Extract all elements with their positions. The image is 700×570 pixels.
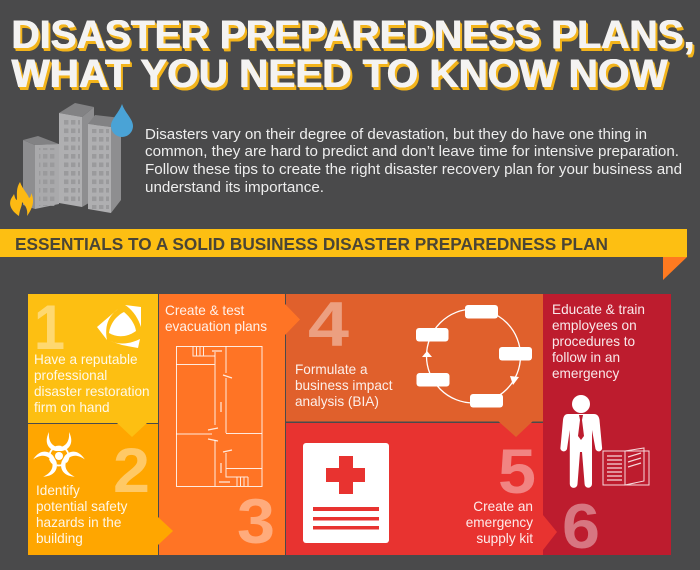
step 6 text: employees on bbox=[552, 318, 637, 333]
intro text: Follow these tips to create the right disaster recovery plan for your business and bbox=[145, 162, 682, 178]
step 6 text bbox=[552, 302, 645, 381]
step 3 text bbox=[165, 303, 267, 334]
icon: cycle diagram bbox=[416, 305, 532, 408]
icon: open manual bbox=[603, 448, 649, 485]
number 3: 3 bbox=[237, 487, 275, 557]
arrow to step 3 bbox=[158, 517, 173, 545]
arrow to step 2 bbox=[117, 423, 147, 437]
intro text: Disasters vary on their degree of devastation, but they do have one thing in bbox=[145, 127, 647, 143]
step 1 text: Have a reputable bbox=[34, 352, 138, 367]
panel: step 5 emergency supply kit bbox=[286, 423, 557, 555]
banner heading: ESSENTIALS TO A SOLID BUSINESS DISASTER PREPAREDNESS PLAN bbox=[15, 234, 608, 254]
icon: city buildings with fire and water bbox=[10, 103, 133, 216]
step 2 text: hazards in the bbox=[36, 515, 121, 530]
arrow to step 4 bbox=[285, 304, 300, 335]
icon: restoration firm logo bbox=[97, 305, 141, 348]
arrow to step 6 bbox=[543, 515, 557, 550]
step 5 text: supply kit bbox=[476, 531, 533, 546]
icon: water drop bbox=[111, 104, 133, 137]
step 1 text: firm on hand bbox=[34, 400, 110, 415]
panel: step 3 evacuation plans bbox=[159, 294, 300, 557]
step 1 text: disaster restoration bbox=[34, 384, 150, 399]
step 1 text bbox=[34, 352, 150, 415]
intro text bbox=[145, 127, 682, 196]
number 4: 4 bbox=[308, 290, 349, 360]
number 1: 1 bbox=[34, 293, 65, 363]
icon: flame bbox=[10, 182, 33, 216]
step 2 text bbox=[36, 483, 128, 546]
icon: biohazard bbox=[32, 432, 86, 479]
intro text: common, they are hard to predict and don’t leave time for intensive preparation. bbox=[145, 144, 679, 160]
step 4 text: business impact bbox=[295, 378, 393, 393]
icon: medical document bbox=[303, 443, 389, 543]
step 1 text: professional bbox=[34, 368, 107, 383]
step 5 text: Create an bbox=[473, 499, 533, 514]
step 5 text bbox=[466, 499, 533, 546]
arrow to step 5 bbox=[498, 421, 533, 437]
step 4 text: analysis (BIA) bbox=[295, 394, 379, 409]
panel: step 1 restoration firm bbox=[28, 293, 158, 437]
step 6 text: procedures to bbox=[552, 334, 635, 349]
step 2 text: Identify bbox=[36, 483, 80, 498]
step 4 text bbox=[295, 362, 393, 409]
step 4 text: Formulate a bbox=[295, 362, 368, 377]
section banner ribbon bbox=[0, 229, 687, 280]
icon: businessman bbox=[560, 395, 602, 488]
step 3 text: Create & test bbox=[165, 303, 245, 318]
step 3 text: evacuation plans bbox=[165, 319, 267, 334]
step 6 text: Educate & train bbox=[552, 302, 645, 317]
title: WHAT YOU NEED TO KNOW NOW bbox=[11, 52, 668, 96]
panel: step 4 business impact analysis bbox=[286, 290, 543, 437]
panel: step 2 safety hazards bbox=[28, 424, 173, 555]
title bbox=[11, 13, 694, 96]
step 5 text: emergency bbox=[466, 515, 533, 530]
intro text: understand its importance. bbox=[145, 180, 324, 196]
panel: step 6 educate and train bbox=[543, 294, 671, 562]
step 6 text: emergency bbox=[552, 366, 619, 381]
title: DISASTER PREPAREDNESS PLANS, bbox=[11, 13, 694, 57]
number 2: 2 bbox=[113, 436, 150, 506]
step 6 text: follow in an bbox=[552, 350, 620, 365]
number 6: 6 bbox=[562, 492, 600, 562]
number 5: 5 bbox=[498, 437, 536, 507]
icon: floor plan bbox=[176, 346, 262, 486]
step 2 text: potential safety bbox=[36, 499, 128, 514]
step 2 text: building bbox=[36, 531, 83, 546]
